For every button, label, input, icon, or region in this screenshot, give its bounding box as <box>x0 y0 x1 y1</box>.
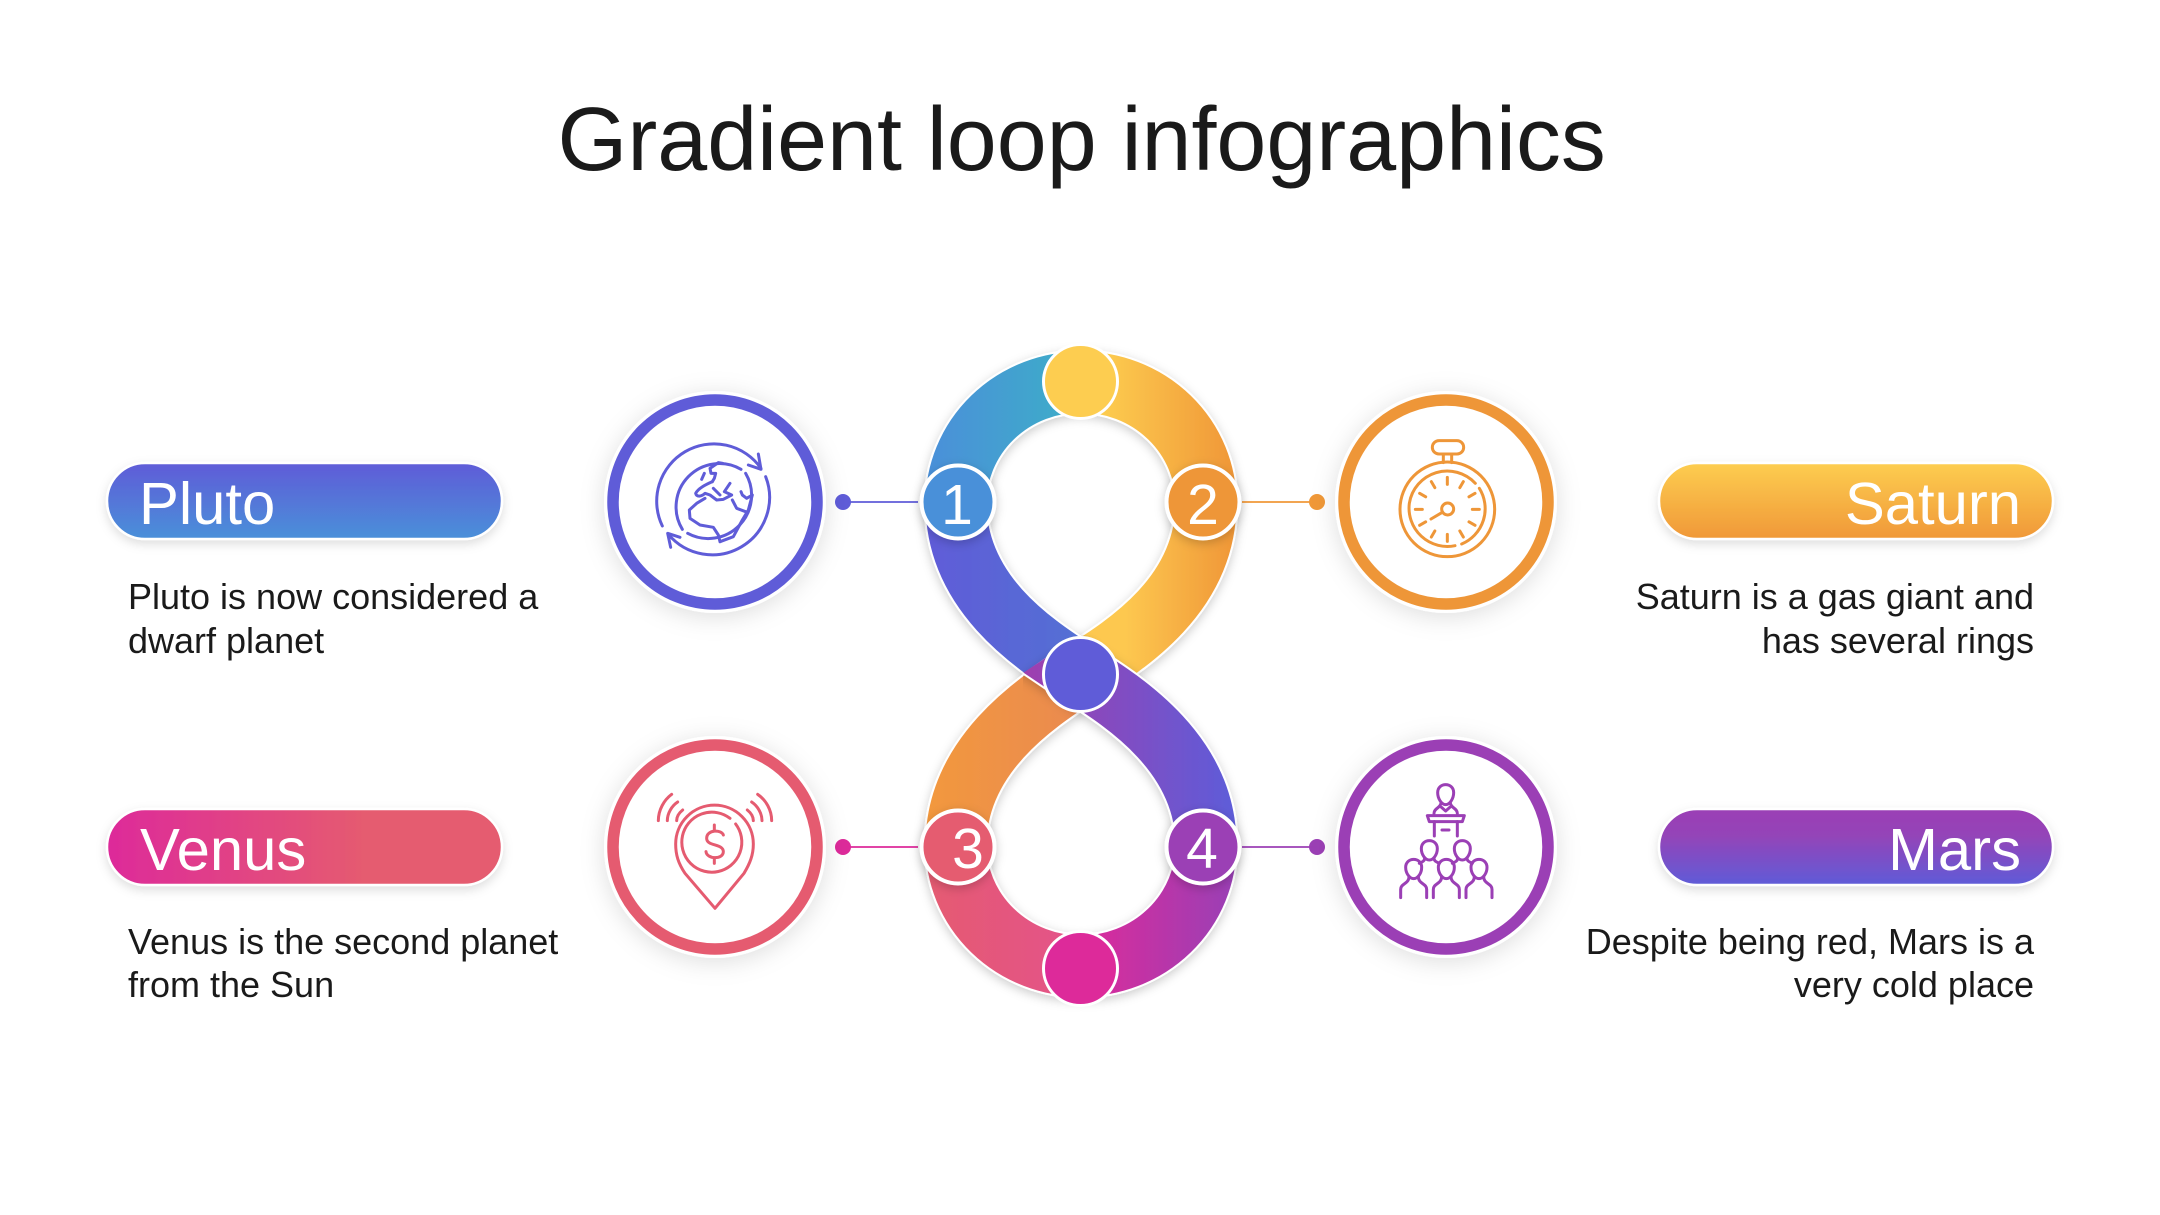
loop segment: top right <box>1081 382 1206 503</box>
pill: Pluto: Pluto <box>139 470 275 537</box>
number badge 2: 2 <box>1187 473 1219 537</box>
node: magenta bottom <box>1044 932 1118 1006</box>
description: Saturn: has several rings <box>1762 620 2034 661</box>
number badge 4: 4 <box>1186 817 1218 881</box>
node: yellow top <box>1044 344 1118 418</box>
panel: Venus icon ring <box>604 736 826 958</box>
title: Gradient loop infographics <box>558 90 1606 190</box>
number badge 2 <box>1166 466 1240 538</box>
panel: Venus label and text <box>107 809 558 1005</box>
description: Venus: from the Sun <box>128 964 334 1005</box>
panel: Saturn icon ring <box>1335 391 1557 613</box>
loop segment: left to crossing <box>956 503 1080 674</box>
icon: location pin with dollar and signal <box>658 794 772 908</box>
pill: Venus: Venus <box>140 816 306 883</box>
connector: Mars <box>1242 839 1325 855</box>
loop segment: top left <box>956 382 1081 503</box>
description: Venus: Venus is the second planet <box>128 921 558 962</box>
node: indigo crossing <box>1044 638 1118 712</box>
loop segment: crossing to lower left <box>956 674 1080 845</box>
panel: Pluto icon ring <box>604 391 826 613</box>
pill: Mars <box>1659 809 2053 885</box>
number badge 1: 1 <box>941 473 973 537</box>
icon: rotating globe <box>657 444 770 555</box>
pill: Venus <box>107 809 502 885</box>
pill: Pluto <box>107 463 502 539</box>
pill: Mars: Mars <box>1888 816 2021 883</box>
number badge 4 <box>1166 810 1240 884</box>
pill: Saturn: Saturn <box>1845 470 2021 537</box>
connector: Saturn <box>1242 494 1325 510</box>
description: Saturn: Saturn is a gas giant and <box>1636 576 2034 617</box>
number badge 3: 3 <box>952 817 984 881</box>
description: Pluto: dwarf planet <box>128 620 324 661</box>
connector: Venus <box>835 839 918 855</box>
description: Mars: very cold place <box>1794 964 2034 1005</box>
panel: Pluto label and text <box>107 463 539 661</box>
icon: stopwatch <box>1400 441 1495 557</box>
panel: Mars icon ring <box>1335 736 1557 958</box>
number badge 1 <box>922 466 994 538</box>
loop segment: bottom right <box>1081 845 1206 966</box>
loop segment: bottom left <box>956 845 1081 966</box>
number badge 3 <box>922 810 994 884</box>
connector: Pluto <box>835 494 918 510</box>
description: Pluto: Pluto is now considered a <box>128 576 539 617</box>
panel: Saturn label and text <box>1636 463 2053 661</box>
figure-eight gradient loop <box>956 344 1206 1006</box>
description: Mars: Despite being red, Mars is a <box>1586 921 2035 962</box>
loop segment: right to crossing <box>1080 503 1206 674</box>
pill: Saturn <box>1659 463 2053 539</box>
loop segment: crossing to lower right <box>1000 620 1206 845</box>
panel: Mars label and text <box>1586 809 2053 1005</box>
icon: speaker at podium with audience <box>1401 785 1492 898</box>
